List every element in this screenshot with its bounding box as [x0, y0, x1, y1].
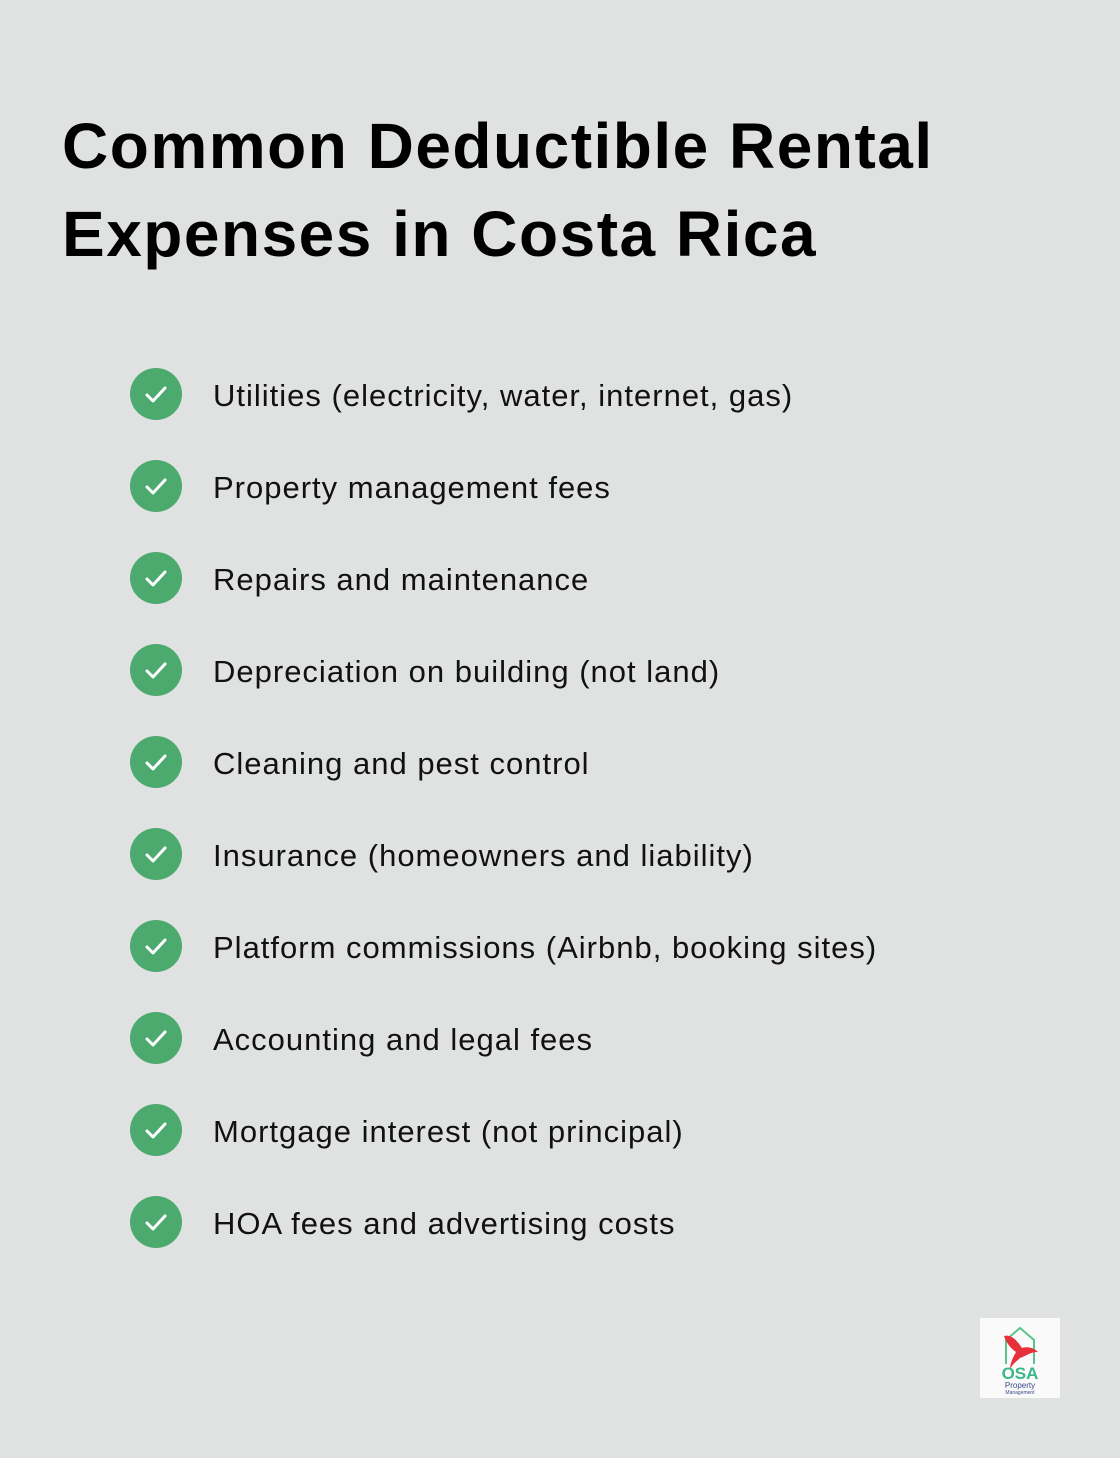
logo: Property [1005, 1381, 1035, 1390]
list item 2 [130, 460, 611, 512]
list item 10 [130, 1196, 676, 1248]
list item 1: Utilities (electricity, water, internet, gas) [213, 378, 793, 413]
list item 9 [130, 1104, 684, 1156]
logo: Management [1005, 1390, 1035, 1396]
list item 10: HOA fees and advertising costs [213, 1206, 676, 1241]
list item 4 [130, 644, 720, 696]
list item 3 [130, 552, 589, 604]
title: Expenses in Costa Rica [62, 198, 817, 270]
list item 3: Repairs and maintenance [213, 562, 589, 597]
list item 2: Property management fees [213, 470, 611, 505]
list item 6 [130, 828, 754, 880]
title: Common Deductible Rental [62, 110, 934, 182]
list item 7 [130, 920, 877, 972]
list item 4: Depreciation on building (not land) [213, 654, 720, 689]
title [62, 110, 934, 270]
list item 8 [130, 1012, 593, 1064]
logo [980, 1318, 1060, 1398]
list item 5: Cleaning and pest control [213, 746, 590, 781]
list item 8: Accounting and legal fees [213, 1022, 593, 1057]
logo: OSA [1002, 1364, 1038, 1383]
list item 1 [130, 368, 793, 420]
list item 6: Insurance (homeowners and liability) [213, 838, 754, 873]
list item 7: Platform commissions (Airbnb, booking sites) [213, 930, 877, 965]
list item 9: Mortgage interest (not principal) [213, 1114, 684, 1149]
list item 5 [130, 736, 590, 788]
